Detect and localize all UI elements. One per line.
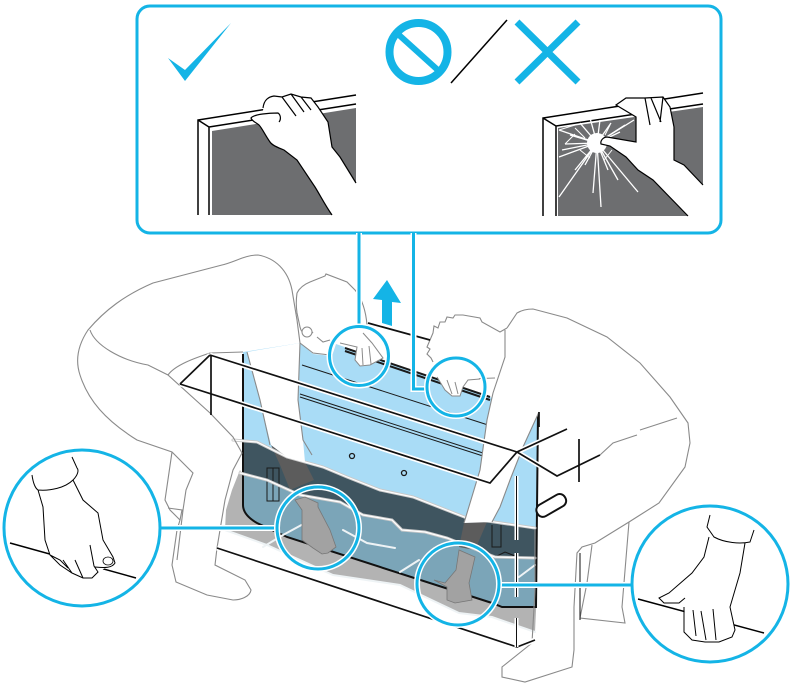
leg fill: [200, 450, 240, 565]
plastic bag lower area: [225, 470, 537, 632]
plastic ribbons: [225, 440, 535, 632]
screen cracks: [559, 118, 638, 207]
thumb nail: [103, 557, 113, 565]
back panel ribs and screws: [267, 348, 520, 558]
callout: lower left hand: [277, 487, 359, 569]
head outline: [296, 274, 367, 355]
box handle slot: [534, 492, 568, 519]
arm fill: [464, 330, 540, 523]
lift arrow: [373, 280, 401, 326]
icon: check mark: [168, 23, 231, 81]
person on the left: [78, 255, 367, 600]
callout: enlarged right hand gripping bottom edge: [632, 506, 788, 662]
callout: upper left hand: [330, 326, 388, 386]
translucent bodies behind bag: [271, 445, 314, 490]
body outline: [464, 309, 690, 682]
body outline: [78, 255, 312, 600]
slash divider: [451, 20, 507, 83]
incorrect grip illustration with cracked screen: [543, 93, 703, 216]
panel: grip instructions: [137, 6, 721, 233]
tv edge lines: [243, 354, 538, 607]
cardboard box lines: [180, 323, 600, 647]
mid blue zone inside bag: [243, 473, 537, 607]
callout: upper right hand: [427, 358, 485, 416]
icon: cross: [517, 22, 578, 82]
leader lines: [160, 233, 632, 585]
callout: lower right hand: [417, 543, 499, 625]
callout: enlarged left hand gripping bottom edge: [4, 450, 160, 606]
icon: prohibited sign: [390, 23, 448, 81]
tv back panel: [243, 343, 537, 607]
correct grip illustration: [198, 94, 356, 215]
ear: [302, 327, 312, 337]
person on the right: [427, 309, 690, 682]
dark zone inside bag: [243, 441, 537, 558]
torso fill: [247, 343, 305, 462]
television in plastic bag: [225, 343, 538, 632]
hair outline: [427, 315, 507, 362]
